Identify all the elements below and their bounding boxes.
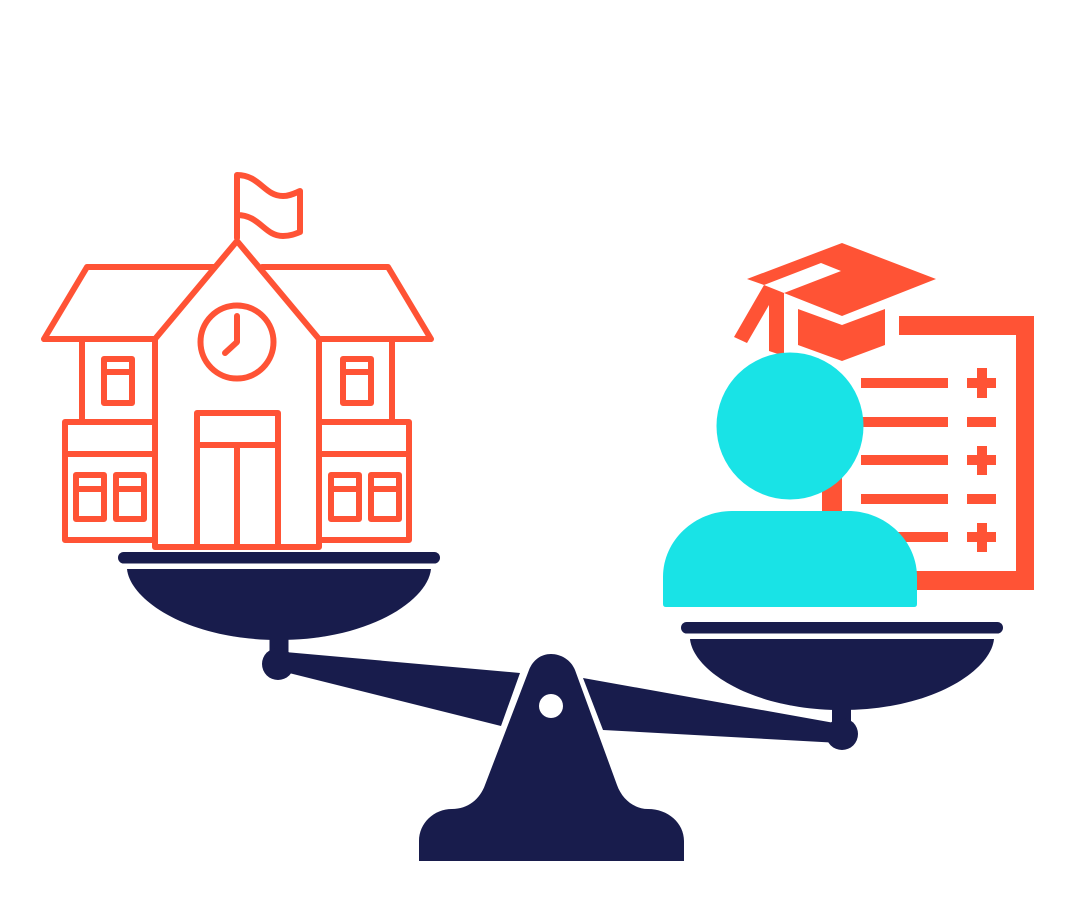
icon: graduation cap — [734, 243, 936, 361]
school upper wing walls — [82, 339, 392, 422]
school wing roofs — [44, 267, 431, 339]
school clock — [200, 306, 274, 378]
right beam arm — [583, 678, 858, 750]
school lower windows — [76, 475, 399, 519]
scale fulcrum stand — [419, 654, 684, 861]
balance scale — [118, 552, 1003, 861]
school lower wings — [65, 422, 409, 540]
school door — [197, 413, 278, 547]
left pan — [118, 552, 440, 658]
icon: student figure — [663, 352, 917, 607]
school upper windows — [104, 359, 371, 403]
icon: school building — [44, 175, 431, 547]
icon: checklist document — [822, 316, 1034, 590]
right pan — [681, 622, 1003, 728]
school main gable and walls — [155, 241, 319, 547]
left beam arm — [262, 648, 520, 726]
school flag — [237, 175, 300, 238]
